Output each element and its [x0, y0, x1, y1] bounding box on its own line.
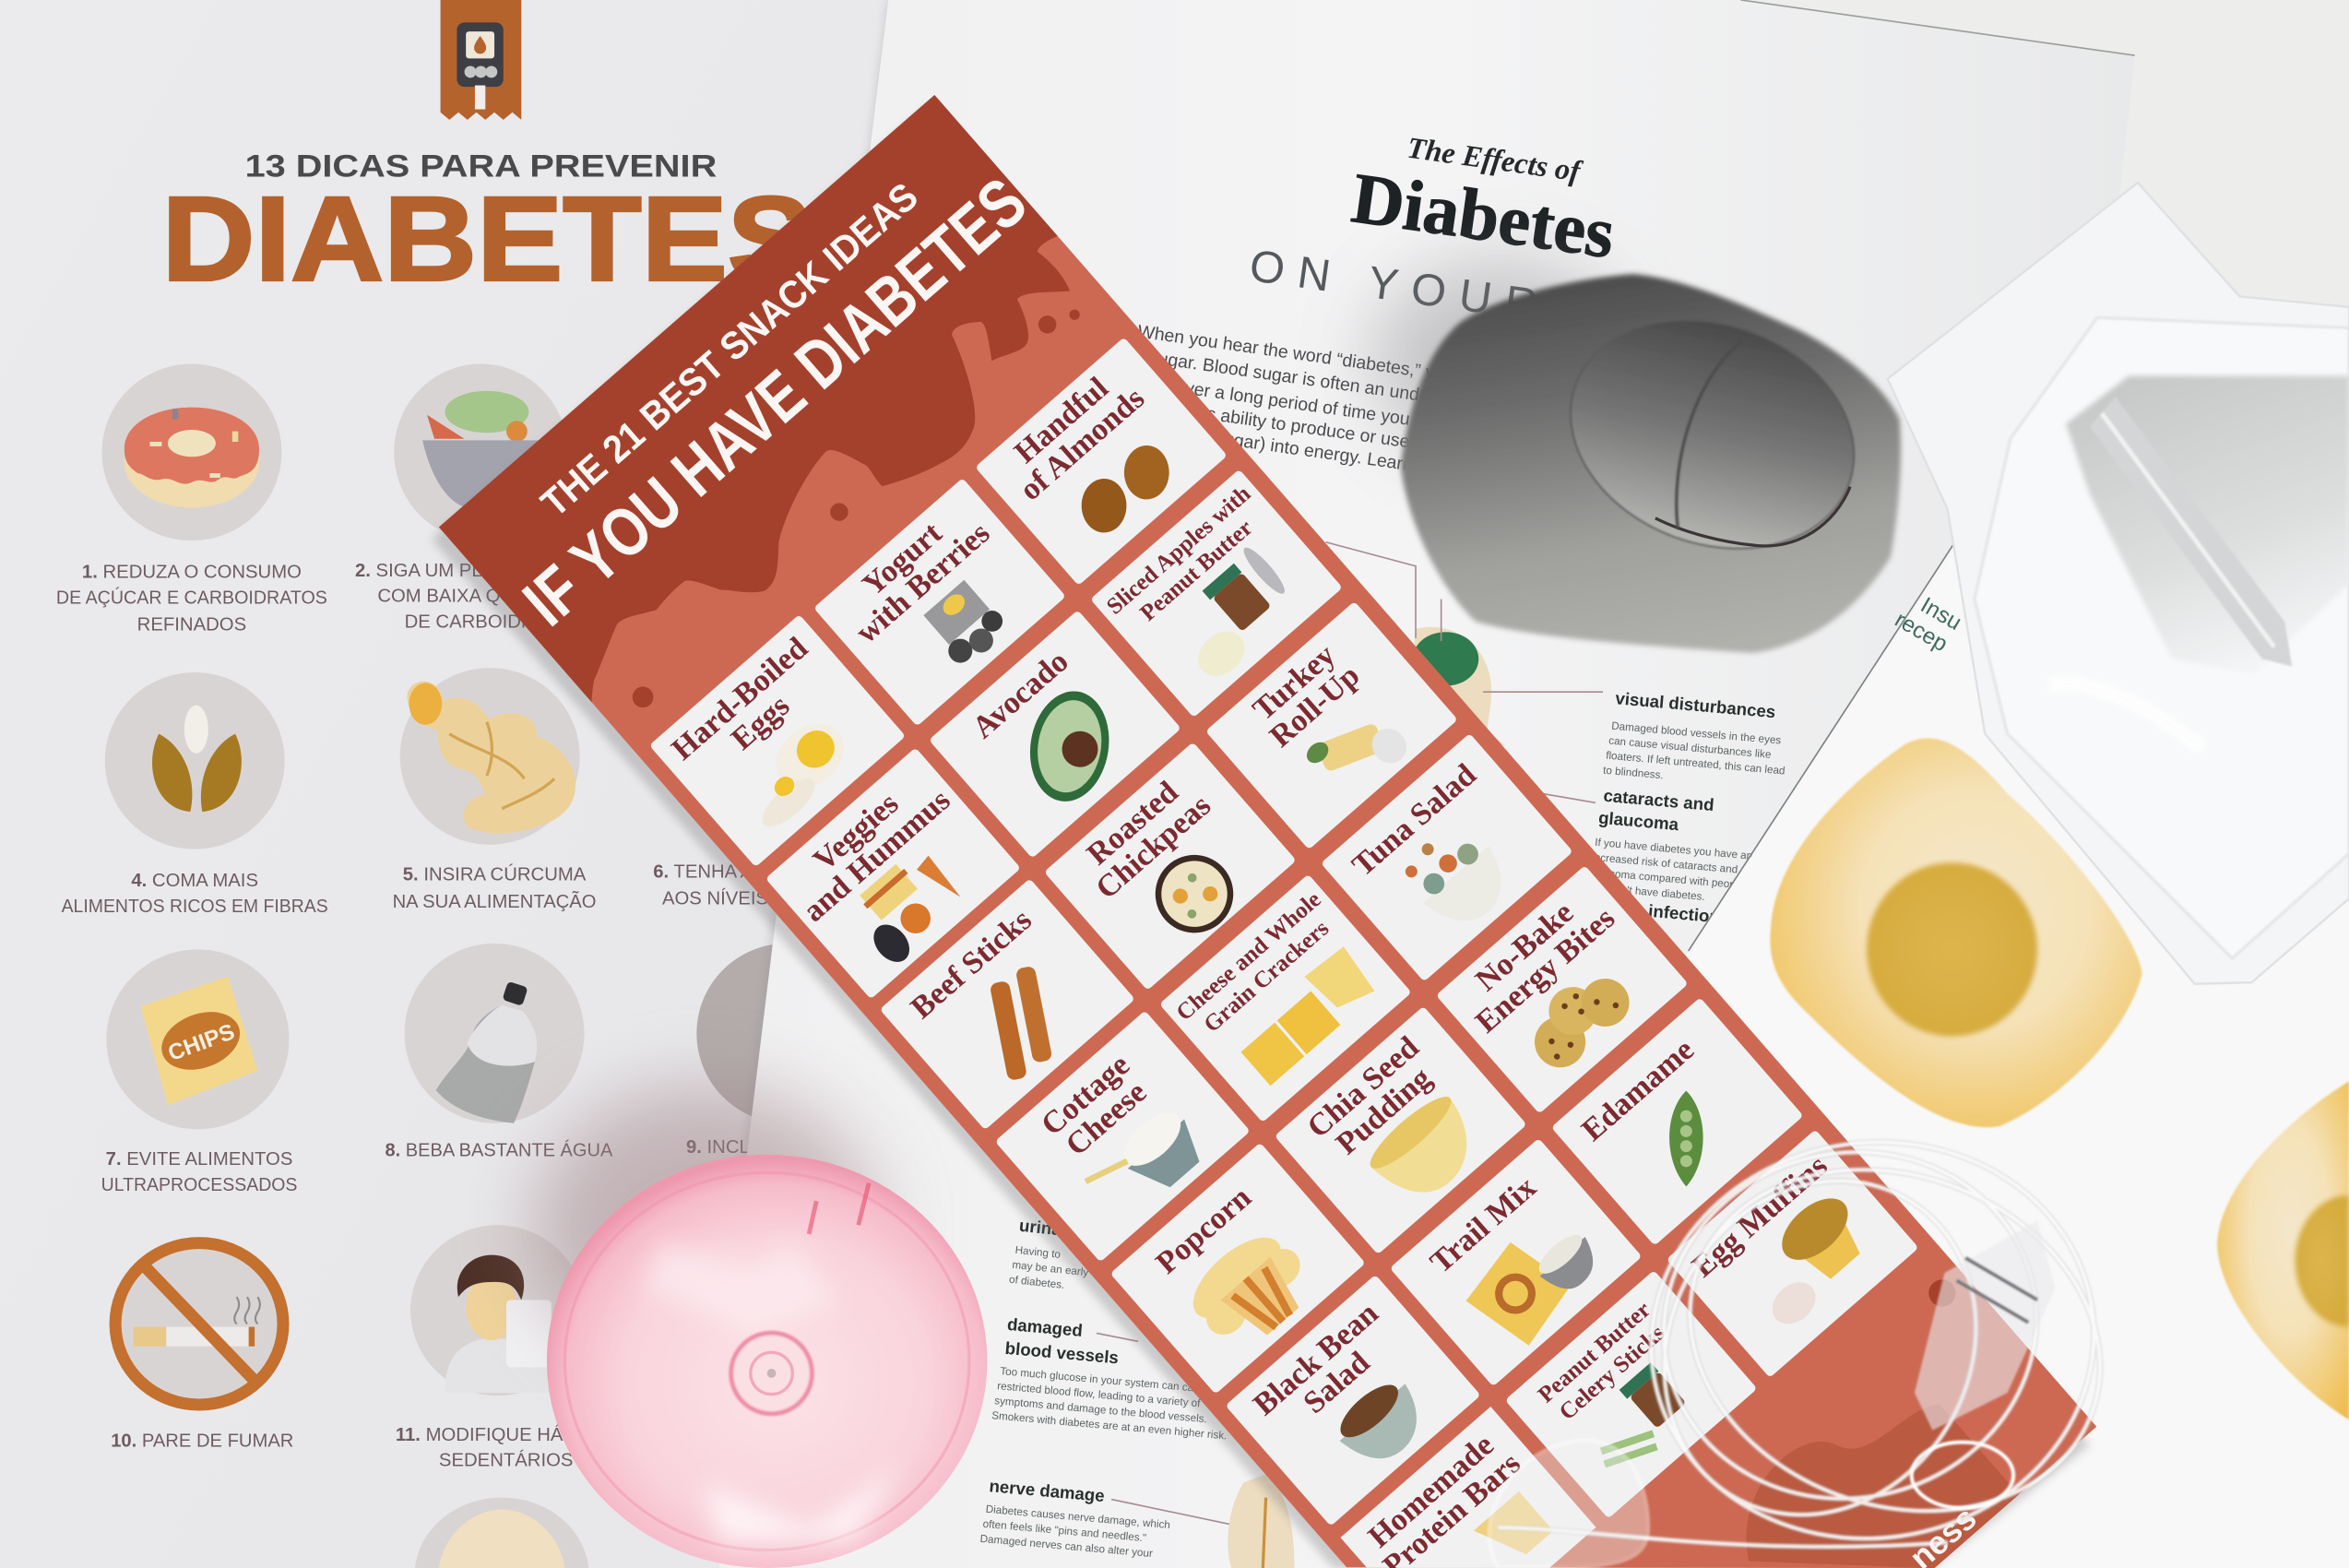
callout: damaged blood vessels [991, 1313, 1236, 1442]
heading: 13 dicas: 13 DICAS PARA PREVENIR [245, 149, 717, 184]
device: clear mask lens [1489, 1441, 1648, 1568]
panel: effects of diabetes leaflet [719, 0, 2135, 1568]
cell: hard-boiled eggs [649, 614, 906, 867]
callout: nerve damage: Diabetes causes nerve damage, which [985, 1503, 1170, 1531]
text: tip 6: AOS NÍVEIS [662, 888, 768, 909]
callout: damaged blood vessels: restricted blood flow, leading to a variety of [997, 1380, 1202, 1409]
cell: egg muffins [1667, 1129, 1918, 1378]
text: tip 5: 5. INSIRA CÚRCUMA [403, 864, 587, 885]
callout: infection: infection [1647, 901, 1721, 926]
cell: turkey roll-up: Turkey [1247, 638, 1342, 727]
cell: peanut butter celery sticks: Celery Sticks [1555, 1320, 1670, 1425]
panel: insulin leaflet with yellow shapes [1348, 360, 2349, 1568]
text: tip 10: 10. PARE DE FUMAR [111, 1431, 293, 1451]
device button [1538, 282, 1886, 587]
icon: tip 13 circle [415, 1498, 588, 1568]
cell: veggies and hummus [765, 747, 1021, 999]
callout: damaged blood vessels: Smokers with diabetes are at an even higher risk. [991, 1409, 1228, 1442]
cell: chia seed pudding: Pudding [1330, 1061, 1438, 1161]
text: intro paragraph: When you hear the word “diabetes,” you [1136, 321, 1455, 386]
text: intro paragraph: (sugar) into energy. Learn [1208, 427, 1414, 475]
device: glucose monitor lancing device [1401, 274, 1901, 653]
callout: urination [1008, 1215, 1094, 1294]
cell: trail mix: Trail Mix [1424, 1170, 1543, 1280]
heading: if you have diabetes: IF YOU HAVE DIABETES [508, 162, 1040, 640]
cell: popcorn: Popcorn [1150, 1181, 1258, 1280]
callout: nerve damage: nerve damage [989, 1476, 1106, 1505]
text: tip 5: NA SUA ALIMENTAÇÃO [393, 891, 596, 912]
cell: hard-boiled eggs: Eggs [725, 689, 796, 756]
callout: urination: urination [1018, 1216, 1094, 1242]
text: tip 11: 11. MODIFIQUE HÁBITOS [396, 1424, 619, 1445]
cell: avocado: Avocado [967, 644, 1075, 745]
callout: cataracts and glaucoma [1585, 785, 1758, 907]
device: blister packaging [1888, 183, 2349, 984]
text: intro paragraph [1123, 321, 1477, 482]
cell: beef sticks [880, 878, 1135, 1130]
cell: peanut butter celery sticks [1505, 1270, 1757, 1518]
callout: infection [1645, 901, 1721, 949]
cell: no-bake energy bites [1436, 865, 1689, 1114]
callout: nerve damage: often feels like "pins and needles." [982, 1518, 1147, 1544]
callout: cataracts and glaucoma: If you have diabetes you have an [1595, 837, 1753, 862]
callout: visual disturbances: visual disturbances [1615, 688, 1776, 721]
text: tip 7 [101, 1149, 297, 1195]
cell: sliced apples with peanut butter: Sliced Apples with [1102, 481, 1255, 620]
text: tip 1: 1. REDUZA O CONSUMO [82, 563, 302, 583]
icon: yellow cell 2 [2217, 1081, 2349, 1420]
icon: water bottle [405, 944, 585, 1123]
icon: salad bowl [394, 364, 568, 540]
text: intro paragraph: over a long period of time you [1174, 376, 1411, 430]
text: tip 4: ALIMENTOS RICOS EM FIBRAS [62, 897, 328, 917]
cell: homemade protein bars: Homemade [1362, 1428, 1501, 1554]
heading: the 21 best snack ideas: THE 21 BEST SNACK IDEAS [533, 174, 926, 525]
text: tip 6: 6. TENHA ATENÇÃO [653, 861, 829, 882]
lancing device shadow [1370, 262, 1625, 457]
callout: cataracts and glaucoma: glaucoma compared with people [1589, 866, 1744, 891]
text: tip 1: DE AÇÚCAR E CARBOIDRATOS [56, 587, 327, 608]
cell: no-bake energy bites: No-Bake [1469, 896, 1580, 998]
text: tip 7: ULTRAPROCESSADOS [101, 1175, 297, 1195]
icon: no smoking [115, 1243, 283, 1405]
panel: 13 tips leaflet [0, 0, 899, 1568]
decorative drips [619, 297, 1088, 712]
cell: tuna salad: Tuna Salad [1346, 757, 1483, 883]
callout: infection: raise [1645, 932, 1670, 945]
text: intro paragraph: y's ability to produce or use [1193, 402, 1411, 452]
icon: chips bag: CHIPS [165, 1019, 238, 1066]
cell: turkey roll-up [1205, 601, 1458, 849]
cell: veggies and hummus: Veggies [807, 787, 905, 878]
text: tip 4 [62, 871, 328, 917]
cell: chia seed pudding [1275, 1006, 1527, 1254]
text: intro paragraph: ugar. Blood sugar is often an underlying [1157, 349, 1473, 412]
blister highlight [2049, 683, 2202, 749]
text: tip 11: SEDENTÁRIOS [439, 1450, 573, 1471]
callout: cataracts and glaucoma: increased risk of cataracts and [1592, 851, 1738, 876]
cell: black bean salad: Black Bean [1247, 1296, 1385, 1422]
cell: cottage cheese: Cheese [1060, 1075, 1153, 1163]
blister cavity [2066, 376, 2349, 674]
cell: handful of almonds: Handful [1008, 371, 1115, 470]
paper shadow [725, 0, 899, 1568]
cap shadow [532, 1086, 876, 1371]
callout: damaged blood vessels: Too much glucose in your system can cause [1000, 1365, 1211, 1396]
cell: sliced apples with peanut butter [1090, 469, 1343, 718]
cell: yogurt with berries: with Berries [849, 516, 996, 650]
cell: black bean salad: Salad [1298, 1346, 1376, 1420]
callout: damaged blood vessels: symptoms and damage to the blood vessels. [994, 1395, 1207, 1425]
callout: visual disturbances [1603, 688, 1791, 792]
cell: popcorn [1110, 1143, 1366, 1395]
cap centre nozzle [731, 1333, 812, 1414]
cell: turkey roll-up: Roll-Up [1263, 659, 1366, 754]
callout: nerve damage: Damaged nerves can also alter your [979, 1533, 1153, 1560]
text: tip 2: COM BAIXA QUANTIDADE [377, 587, 609, 607]
icon: sedentary person [410, 1225, 585, 1396]
cell: cottage cheese [995, 1011, 1251, 1262]
cell: cheese and whole grain crackers: Cheese and Whole [1172, 887, 1326, 1026]
heading: the effects of: The Effects of [1406, 132, 1585, 189]
device: clear tubing [1498, 1111, 2149, 1568]
cell: hard-boiled eggs: Hard-Boiled [666, 631, 814, 767]
text: tip 8: 8. BEBA BASTANTE ÁGUA [385, 1139, 613, 1160]
callout: urination: Having to [1014, 1244, 1062, 1261]
cell: yogurt with berries [813, 478, 1066, 727]
cell: egg muffins: Egg Muffins [1686, 1148, 1834, 1284]
cell: cheese and whole grain crackers: Grain Crackers [1199, 916, 1334, 1038]
cell: cheese and whole grain crackers [1159, 874, 1412, 1123]
cell: cottage cheese: Cottage [1035, 1048, 1136, 1143]
text: tip 4: 4. COMA MAIS [131, 871, 258, 891]
cell: black bean salad [1226, 1275, 1481, 1526]
icon: almonds [105, 672, 285, 849]
cell: edamame [1551, 997, 1804, 1246]
cell: sliced apples with peanut butter: Peanut Butter [1135, 516, 1257, 626]
snack card shadow [432, 105, 2090, 1568]
heading: diabetes: Diabetes [1347, 158, 1619, 273]
cell: yogurt with berries: Yogurt [856, 516, 949, 602]
text: tip 1: REFINADOS [137, 615, 246, 636]
text: tip 2: DE CARBOIDRATOS [405, 612, 584, 632]
icon: glucose meter ribbon [441, 0, 521, 120]
icon: chips bag [106, 949, 290, 1129]
chart: brain and head illustration [1326, 542, 1603, 802]
cell: chia seed pudding: Chia Seed [1301, 1030, 1426, 1145]
text: insulin receptor label: recep [1891, 607, 1952, 657]
cell: roasted chickpeas: Chickpeas [1089, 789, 1217, 906]
callout: damaged blood vessels: damaged [1006, 1314, 1084, 1340]
cell: peanut butter celery sticks: Peanut Butter [1534, 1297, 1655, 1408]
callout: nerve damage [979, 1476, 1237, 1567]
text: insulin receptor label [1891, 585, 1965, 658]
cell: no-bake energy bites: Energy Bites [1469, 901, 1621, 1039]
icon: leg illustration [1228, 1474, 1294, 1568]
text: insulin receptor label: Insu [1916, 593, 1965, 636]
icon: donut [101, 364, 281, 540]
callout: visual disturbances: floaters. If left untreated, this can lead [1606, 750, 1785, 778]
icon: partly hidden tip 9 circle [696, 944, 876, 1123]
cell: roasted chickpeas: Roasted [1081, 775, 1185, 872]
device: tubing connector [1912, 1220, 2056, 1508]
cell: roasted chickpeas [1044, 742, 1297, 991]
callout: cataracts and glaucoma: glaucoma [1597, 808, 1680, 834]
callout: visual disturbances: can cause visual disturbances like [1608, 735, 1772, 761]
callout: urination: of diabetes. [1008, 1274, 1065, 1291]
header: wave background [439, 95, 1121, 742]
text: tip 2: 2. SIGA UM PLANO [355, 561, 523, 581]
cell: veggies and hummus: and Hummus [797, 783, 957, 929]
callout: urination: may be an early [1012, 1259, 1089, 1278]
lancet [2090, 397, 2292, 667]
text: tip 5 [393, 864, 596, 912]
text: tip 11 [396, 1424, 619, 1471]
text: tip 9: 9. INCLUA [686, 1137, 776, 1158]
footer: card base blobs [1691, 1274, 2085, 1568]
text: tip 6 [653, 861, 829, 909]
cell: trail mix [1390, 1138, 1642, 1386]
cell: homemade protein bars [1340, 1407, 1596, 1568]
callout: visual disturbances: to blindness. [1603, 765, 1664, 781]
callout: cataracts and glaucoma: who don't have diabetes. [1585, 881, 1705, 903]
cell: handful of almonds [975, 338, 1228, 586]
cell: beef sticks: Beef Sticks [905, 903, 1038, 1026]
panel: snack ideas card [439, 95, 2097, 1568]
heading: on your body: ON YOUR BODY [1247, 241, 1759, 362]
callout: damaged blood vessels: blood vessels [1004, 1338, 1120, 1367]
cell: handful of almonds: of Almonds [1014, 381, 1151, 507]
text: tip 7: 7. EVITE ALIMENTOS [106, 1149, 292, 1170]
cell: edamame: Edamame [1575, 1033, 1701, 1148]
callout: cataracts and glaucoma: cataracts and [1603, 786, 1714, 814]
callout: visual disturbances: Damaged blood vessels in the eyes [1611, 720, 1782, 747]
icon: turmeric root [400, 668, 580, 845]
cell: avocado [929, 610, 1185, 862]
icon: yellow cell 1 [1770, 738, 2142, 1127]
cell: tuna salad [1321, 733, 1573, 981]
text: tip 1 [56, 563, 327, 636]
tubing highlights [1498, 1111, 2149, 1568]
device: pink cap [547, 1155, 987, 1568]
heading: diabetes: DIABETES [161, 172, 813, 306]
text: tip 2 [355, 561, 609, 632]
